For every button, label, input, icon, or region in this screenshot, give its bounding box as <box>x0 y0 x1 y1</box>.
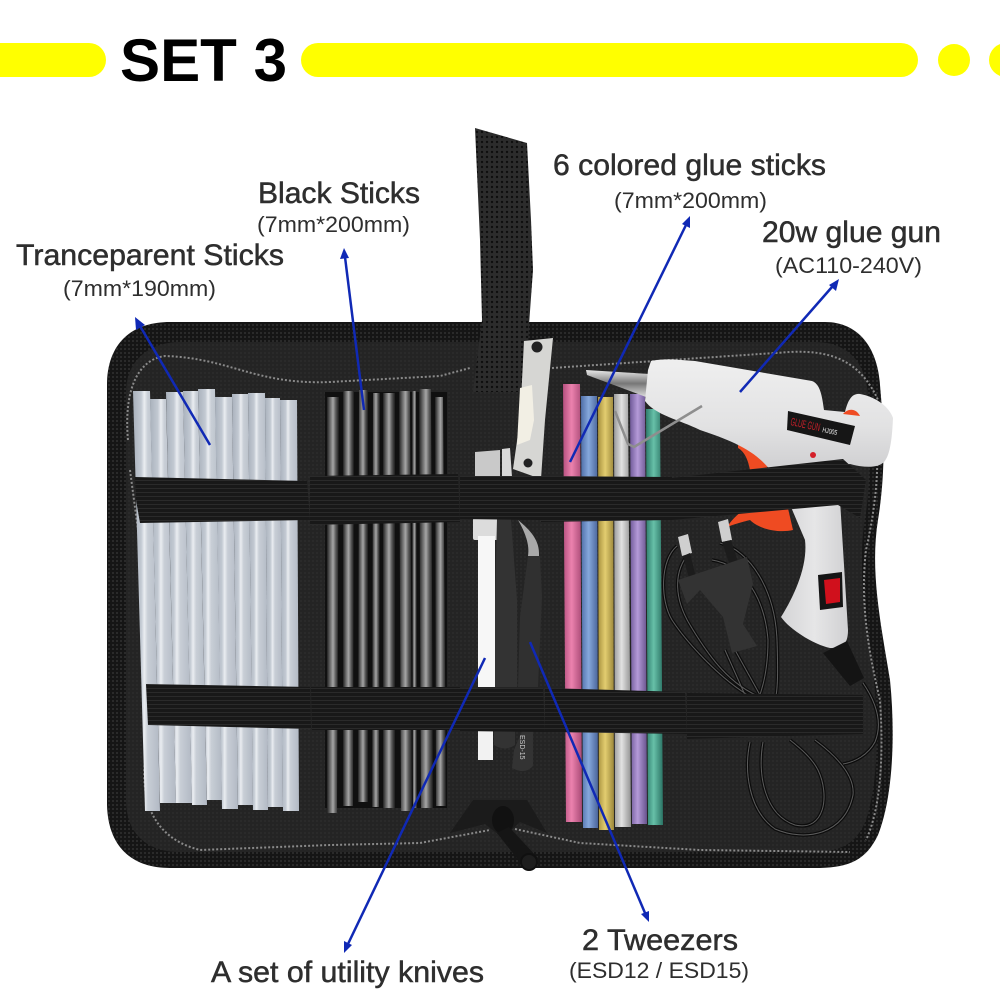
gun body <box>645 359 893 470</box>
case with contents <box>107 128 893 870</box>
arrow: black sticks <box>340 248 364 410</box>
label: transparent sticks: Tranceparent Sticks <box>16 239 284 272</box>
gun stand hook <box>615 406 702 447</box>
gun feed flap <box>843 410 860 416</box>
title: SET 3 <box>120 27 287 94</box>
power plug <box>678 519 757 653</box>
label: colored sticks: (7mm*200mm) <box>614 188 767 213</box>
gun indicator light <box>810 452 816 458</box>
utility knife handle <box>473 518 499 760</box>
label: transparent sticks: (7mm*190mm) <box>63 276 216 301</box>
label: glue gun: 20w glue gun <box>762 216 941 249</box>
colored glue sticks <box>563 384 663 830</box>
power cord <box>664 543 878 835</box>
power cord highlight <box>664 543 878 835</box>
label: black sticks: (7mm*200mm) <box>257 212 410 237</box>
gun trigger <box>727 445 793 531</box>
label: colored sticks <box>553 149 826 213</box>
label: transparent sticks <box>16 239 284 301</box>
label: glue gun <box>762 216 941 278</box>
gun label: GLUE GUN <box>789 416 821 434</box>
arrow: transparent sticks <box>135 317 210 445</box>
gun power switch <box>818 572 843 610</box>
cord strain relief <box>823 641 864 686</box>
label: glue gun: (AC110-240V) <box>775 253 922 278</box>
label: tweezers: (ESD12 / ESD15) <box>569 958 749 983</box>
elastic bands <box>135 459 866 739</box>
gun label: HJ005 <box>822 427 838 437</box>
label: black sticks <box>257 177 420 237</box>
glue gun <box>586 359 893 686</box>
labels <box>16 149 941 989</box>
zipper lines <box>127 352 881 852</box>
transparent glue sticks <box>133 389 299 811</box>
gun nozzle <box>586 370 650 397</box>
utility knife blade holder <box>475 338 553 479</box>
label: tweezers: 2 Tweezers <box>582 924 738 957</box>
label: colored sticks: 6 colored glue sticks <box>553 149 826 182</box>
label: black sticks: Black Sticks <box>258 177 420 210</box>
case strap <box>473 128 533 392</box>
case outer shell <box>107 322 893 868</box>
arrow: utility knives <box>344 658 485 953</box>
tweezers: ESD-15 <box>518 735 525 760</box>
label: utility knives: A set of utility knives <box>211 956 484 989</box>
case interior <box>126 342 877 852</box>
header bar <box>0 43 1000 77</box>
arrow: tweezers <box>530 642 649 922</box>
arrows <box>135 216 839 953</box>
zipper pull <box>450 800 547 870</box>
gun handle <box>781 500 848 648</box>
tweezers <box>494 519 542 771</box>
arrow: glue gun <box>740 279 839 392</box>
label: tweezers <box>569 924 749 983</box>
arrow: colored sticks <box>570 216 690 462</box>
gun label <box>787 411 855 445</box>
black glue sticks <box>325 389 447 813</box>
